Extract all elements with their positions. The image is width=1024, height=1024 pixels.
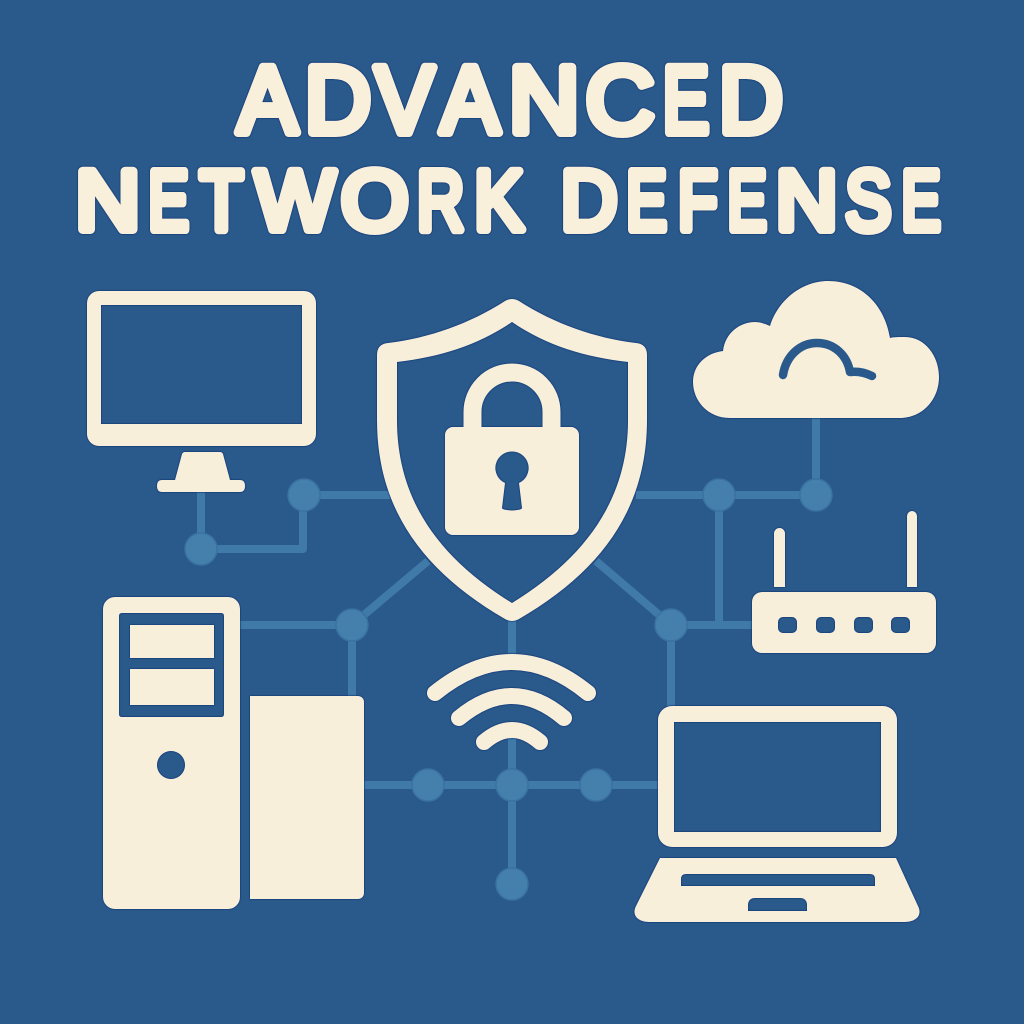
title line 2: N (776, 154, 838, 248)
icon: laptop (634, 706, 920, 922)
title line 2: T (200, 154, 243, 248)
title (76, 48, 941, 248)
icon: desktop monitor (87, 291, 316, 492)
network nodes (185, 479, 832, 900)
title line 2: O (341, 154, 408, 248)
title line 2: S (845, 154, 891, 248)
title line 2: W (255, 154, 335, 248)
title line 1: D (305, 48, 371, 154)
title line 1: V (375, 48, 434, 154)
network connection lines (201, 415, 816, 884)
icon: router (752, 511, 936, 653)
title line 1: D (719, 48, 783, 154)
title line 1: A (238, 48, 297, 154)
title line 2: N (76, 154, 140, 248)
title line 1: E (662, 48, 709, 154)
icon: padlock (445, 372, 579, 535)
title line 1: C (586, 48, 654, 154)
shield outline (377, 299, 647, 621)
icon: cloud (693, 281, 939, 418)
title line 2: K (474, 154, 523, 248)
title line 1: A (441, 48, 499, 154)
title line 2: F (678, 154, 718, 248)
icon: server tower (103, 597, 364, 909)
icon: wifi (435, 662, 588, 742)
title line 2: E (727, 154, 767, 248)
title line 2: E (626, 154, 667, 248)
title line 1: N (509, 48, 580, 154)
icon: shield with padlock (377, 299, 647, 621)
title line 2: E (148, 154, 189, 248)
title line 2: R (417, 154, 464, 248)
title line 2: E (901, 154, 941, 248)
title line 2: D (561, 154, 617, 248)
